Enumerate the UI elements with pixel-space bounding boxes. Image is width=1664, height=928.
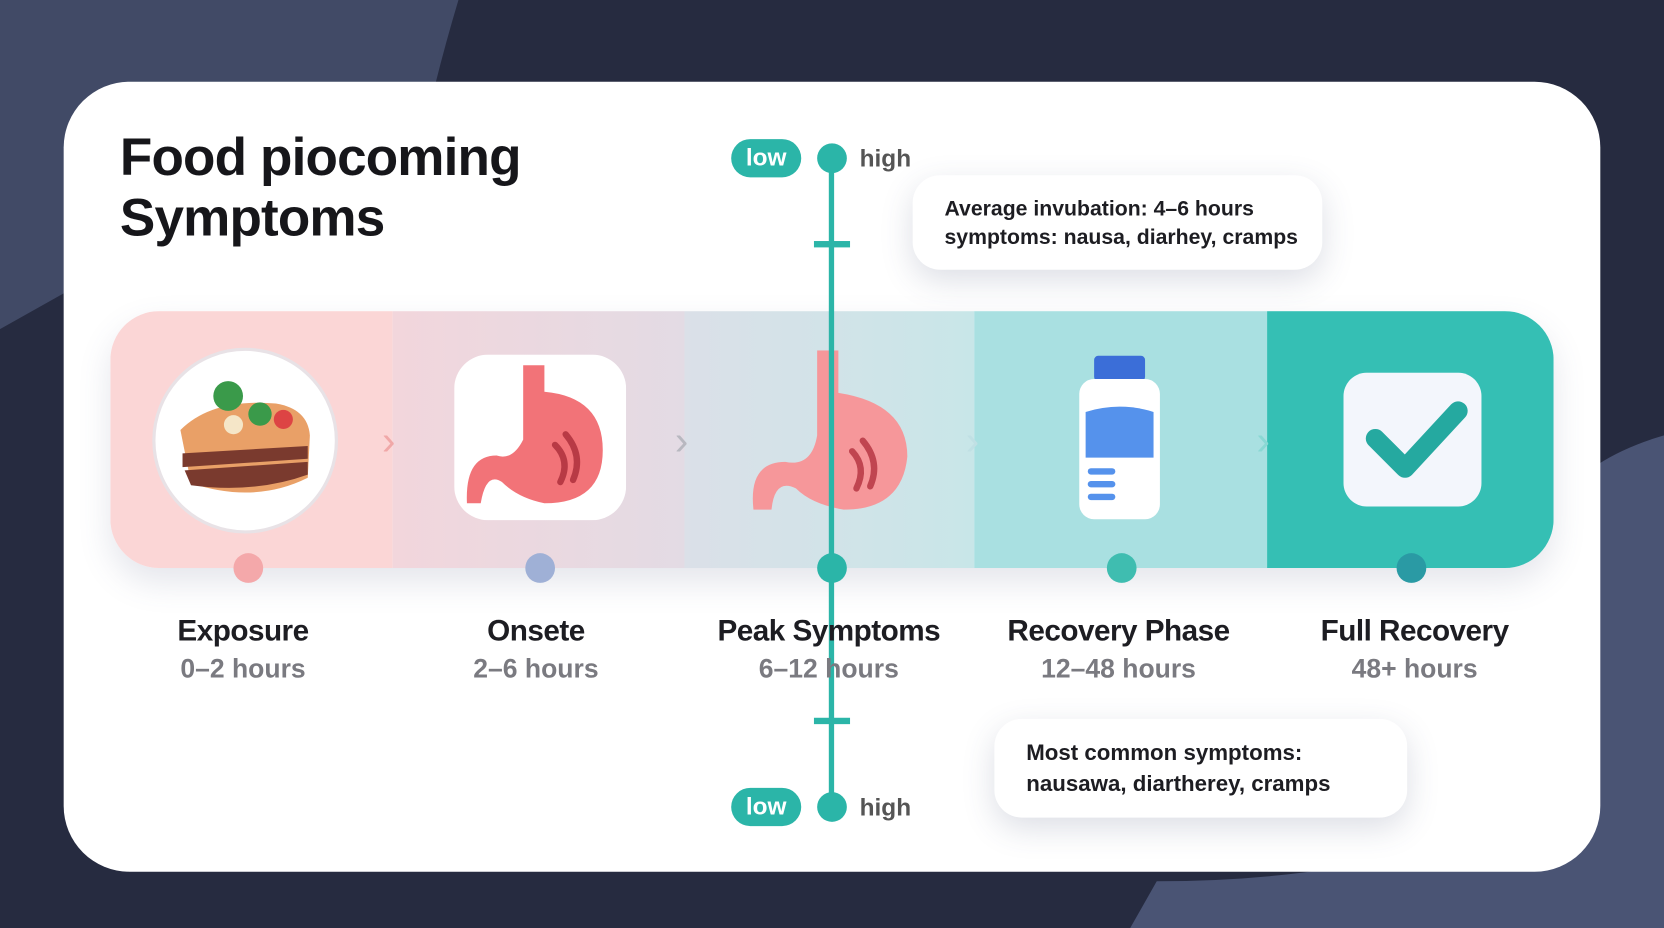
dots bbox=[234, 553, 1426, 583]
scale bottom: low bbox=[746, 792, 787, 820]
callout top bbox=[913, 175, 1322, 270]
callout bottom: Most common symptoms: bbox=[1026, 741, 1302, 766]
scale top: low bbox=[746, 143, 787, 171]
arrows: › bbox=[382, 419, 395, 464]
label: exposure: Exposure bbox=[177, 614, 309, 647]
arrow 3: › bbox=[966, 419, 979, 464]
callout bottom bbox=[994, 719, 1407, 818]
label: recovery phase: Recovery Phase bbox=[1007, 614, 1230, 647]
label: peak bbox=[717, 614, 940, 684]
timeline band bbox=[110, 311, 1554, 568]
vertical scale line bbox=[829, 158, 834, 807]
arrow 4: › bbox=[1256, 419, 1270, 464]
label: onset: Onsete bbox=[487, 614, 585, 647]
label: exposure bbox=[177, 614, 309, 684]
label: full recovery: Full Recovery bbox=[1321, 614, 1509, 647]
label: recovery phase: 12–48 hours bbox=[1041, 654, 1196, 684]
icon: bottle bbox=[1079, 356, 1160, 520]
label: full recovery bbox=[1321, 614, 1509, 684]
scale top bbox=[731, 139, 911, 178]
label: onset bbox=[473, 614, 599, 684]
label: peak: Peak Symptoms bbox=[717, 614, 940, 647]
label: peak: 6–12 hours bbox=[759, 654, 899, 684]
scale bottom: high bbox=[860, 793, 911, 821]
tick top bbox=[814, 241, 850, 247]
icon: stomach peak bbox=[752, 350, 908, 510]
label: exposure: 0–2 hours bbox=[180, 654, 306, 684]
title: Food piocoming bbox=[120, 127, 521, 187]
icon: stomach onset bbox=[454, 354, 626, 520]
scale top: high bbox=[860, 144, 911, 172]
card bbox=[64, 82, 1600, 872]
callout top: symptoms: nausa, diarhey, cramps bbox=[944, 226, 1298, 250]
tick bottom bbox=[814, 718, 850, 724]
callout top: Average invubation: 4–6 hours bbox=[944, 197, 1254, 221]
title: Symptoms bbox=[120, 188, 384, 247]
title bbox=[120, 127, 521, 247]
label: full recovery: 48+ hours bbox=[1352, 654, 1478, 684]
label: recovery phase bbox=[1007, 614, 1230, 684]
arrow 2: › bbox=[675, 419, 688, 464]
label: onset: 2–6 hours bbox=[473, 654, 599, 684]
icon: check bbox=[1344, 372, 1482, 506]
icon: food plate bbox=[152, 348, 338, 534]
callout bottom: nausawa, diartherey, cramps bbox=[1026, 772, 1331, 796]
scale bottom bbox=[731, 788, 911, 826]
